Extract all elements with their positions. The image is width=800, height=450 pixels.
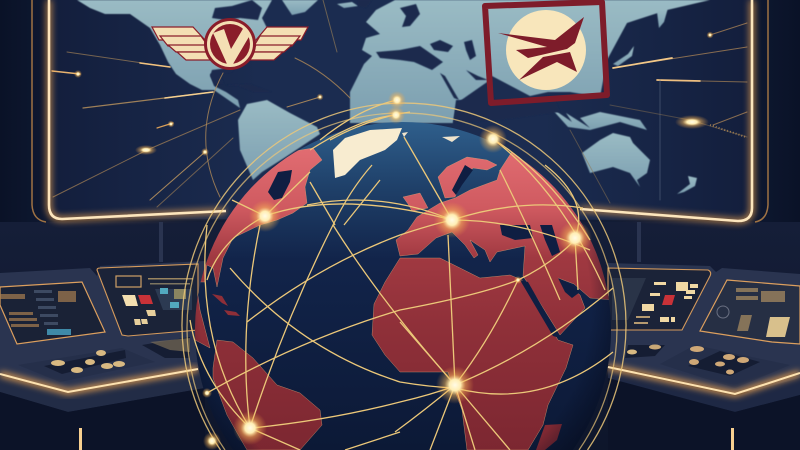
right wing (250, 27, 308, 60)
poles below the screen (159, 222, 641, 262)
orbit rings (182, 103, 626, 450)
limb shading (195, 192, 611, 450)
globe land: red continents (190, 148, 620, 450)
button deck (625, 345, 665, 358)
glowing strip (0, 369, 198, 392)
globe ocean (195, 122, 611, 450)
globe land: Madagascar (536, 424, 562, 450)
floor light markers (79, 428, 734, 450)
roundel (204, 18, 256, 70)
route network: gold lines (182, 100, 626, 450)
button deck (18, 348, 155, 382)
right screen (700, 280, 800, 344)
globe (190, 120, 620, 450)
panel: wall map screen (49, 0, 752, 222)
route network: glowing hubs (202, 91, 592, 450)
map glows (74, 32, 746, 156)
middle panel (608, 268, 711, 330)
map route streaks (52, 0, 747, 207)
map land masses (77, 0, 710, 194)
icon: red stamp airline logo (485, 2, 607, 103)
globe land: Greenland (333, 128, 402, 178)
lower wall section (0, 222, 800, 450)
seas on the globe (268, 165, 580, 338)
globe land: arctic islands (402, 132, 460, 142)
map seas and bays (210, 0, 560, 123)
icon: winged V airline logo (152, 18, 308, 70)
left screen (0, 282, 105, 344)
panel: right control console (608, 263, 800, 450)
island chain (212, 294, 240, 316)
great-circle arcs (250, 165, 372, 428)
frame: glowing screen border (32, 0, 768, 222)
glowing strip (608, 367, 800, 394)
panel: left control console (0, 261, 205, 450)
right screen cluster (97, 264, 198, 336)
console body (0, 261, 205, 408)
left wing (152, 27, 210, 60)
